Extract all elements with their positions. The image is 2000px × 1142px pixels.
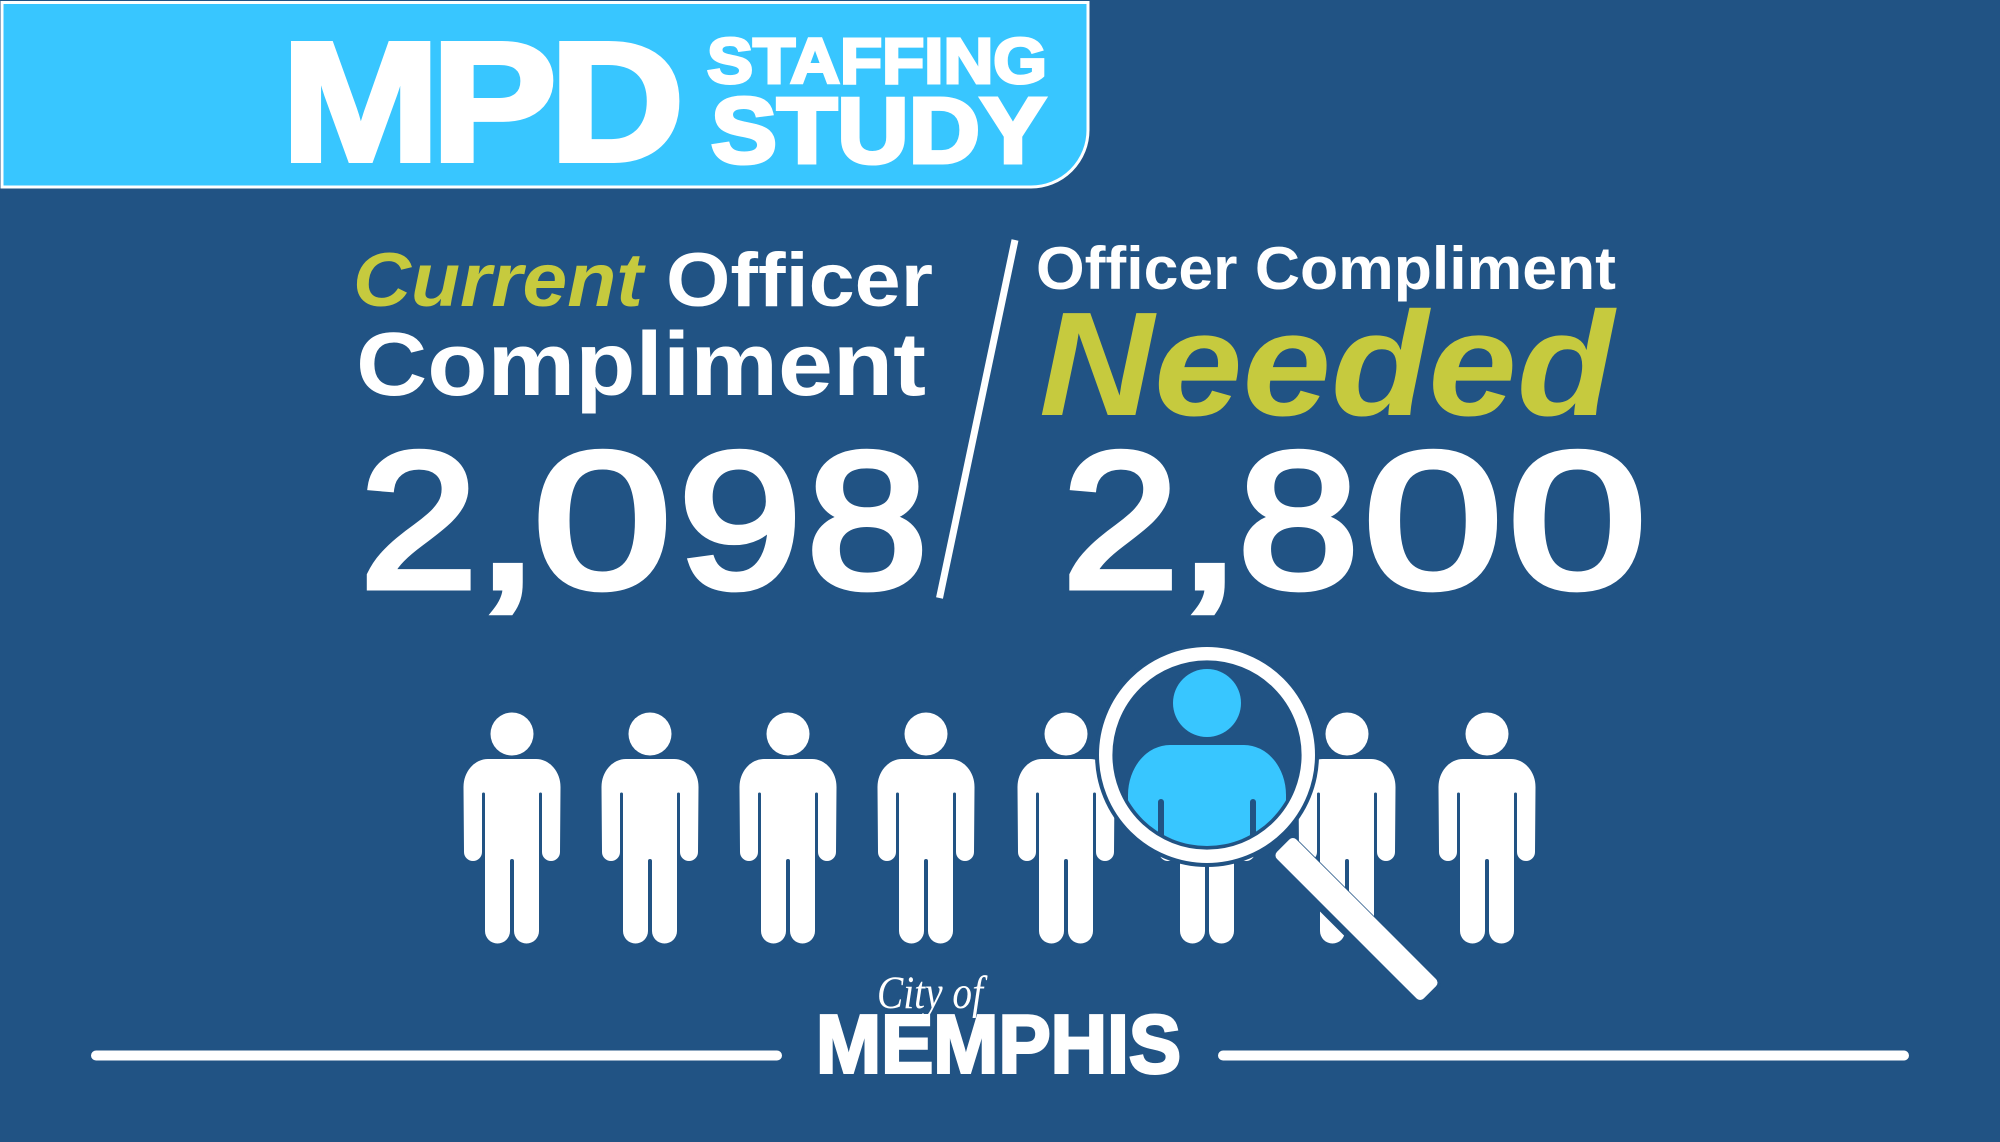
right number: 2,800: , xyxy=(1178,412,1241,628)
icon: person 6 under magnifier xyxy=(1158,759,1256,943)
word: Needed: Needed xyxy=(1039,282,1617,447)
left number: 2,098: 2 xyxy=(360,412,477,628)
left number: 2,098: 9 xyxy=(678,412,802,628)
divider slash xyxy=(940,240,1015,598)
title: STAFFING: STAFFING xyxy=(707,25,1047,97)
title: MPD: D xyxy=(550,8,684,198)
right number: 2,800: 0 xyxy=(1508,412,1646,628)
footer rule right xyxy=(1223,1050,1904,1060)
right number: 2,800: 8 xyxy=(1238,412,1359,628)
footer rule left xyxy=(96,1050,777,1060)
logo: MEMPHIS wordmark: MEMPHIS xyxy=(816,998,1181,1090)
title: MPD: M xyxy=(281,8,440,198)
title: MPD: P xyxy=(431,8,557,198)
lens disc xyxy=(1095,643,1319,867)
words: Officer: Officer xyxy=(666,238,933,323)
word: Current: Current xyxy=(353,238,646,323)
title: STUDY: STUDY xyxy=(711,78,1046,182)
icon: person 8 xyxy=(1438,712,1536,943)
header banner xyxy=(2,2,1088,198)
icon: person 7 xyxy=(1298,712,1396,943)
left number: 2,098: 8 xyxy=(807,412,928,628)
left heading: current officer compliment xyxy=(353,238,933,415)
magnifier handle halo xyxy=(1266,832,1443,1010)
icon: person 5 xyxy=(1018,712,1114,943)
right number: 2,800: 0 xyxy=(1364,412,1502,628)
right heading: officer compliment needed xyxy=(1036,235,1617,447)
left number: 2,098: 0 xyxy=(533,412,671,628)
word: Compliment: Compliment xyxy=(356,315,926,415)
left number: 2,098: , xyxy=(476,412,539,628)
icon: person 2 xyxy=(602,712,698,943)
magnifier ring xyxy=(1106,654,1308,856)
icon: person 4 xyxy=(878,712,974,943)
banner shape xyxy=(2,2,1088,187)
magnifier handle xyxy=(1273,836,1440,1002)
logo: City of script: City of xyxy=(877,967,988,1019)
words: Officer Compliment: Officer Compliment xyxy=(1036,235,1616,302)
icon: person 3 xyxy=(740,712,836,943)
City of Memphis logo xyxy=(816,967,1181,1090)
row of people icons xyxy=(464,712,1536,943)
highlighted blue person xyxy=(1128,669,1286,846)
icon: person 1 xyxy=(464,712,560,943)
right number: 2,800: 2 xyxy=(1063,412,1179,628)
icon: magnifying glass over highlighted person xyxy=(1095,643,1443,1010)
